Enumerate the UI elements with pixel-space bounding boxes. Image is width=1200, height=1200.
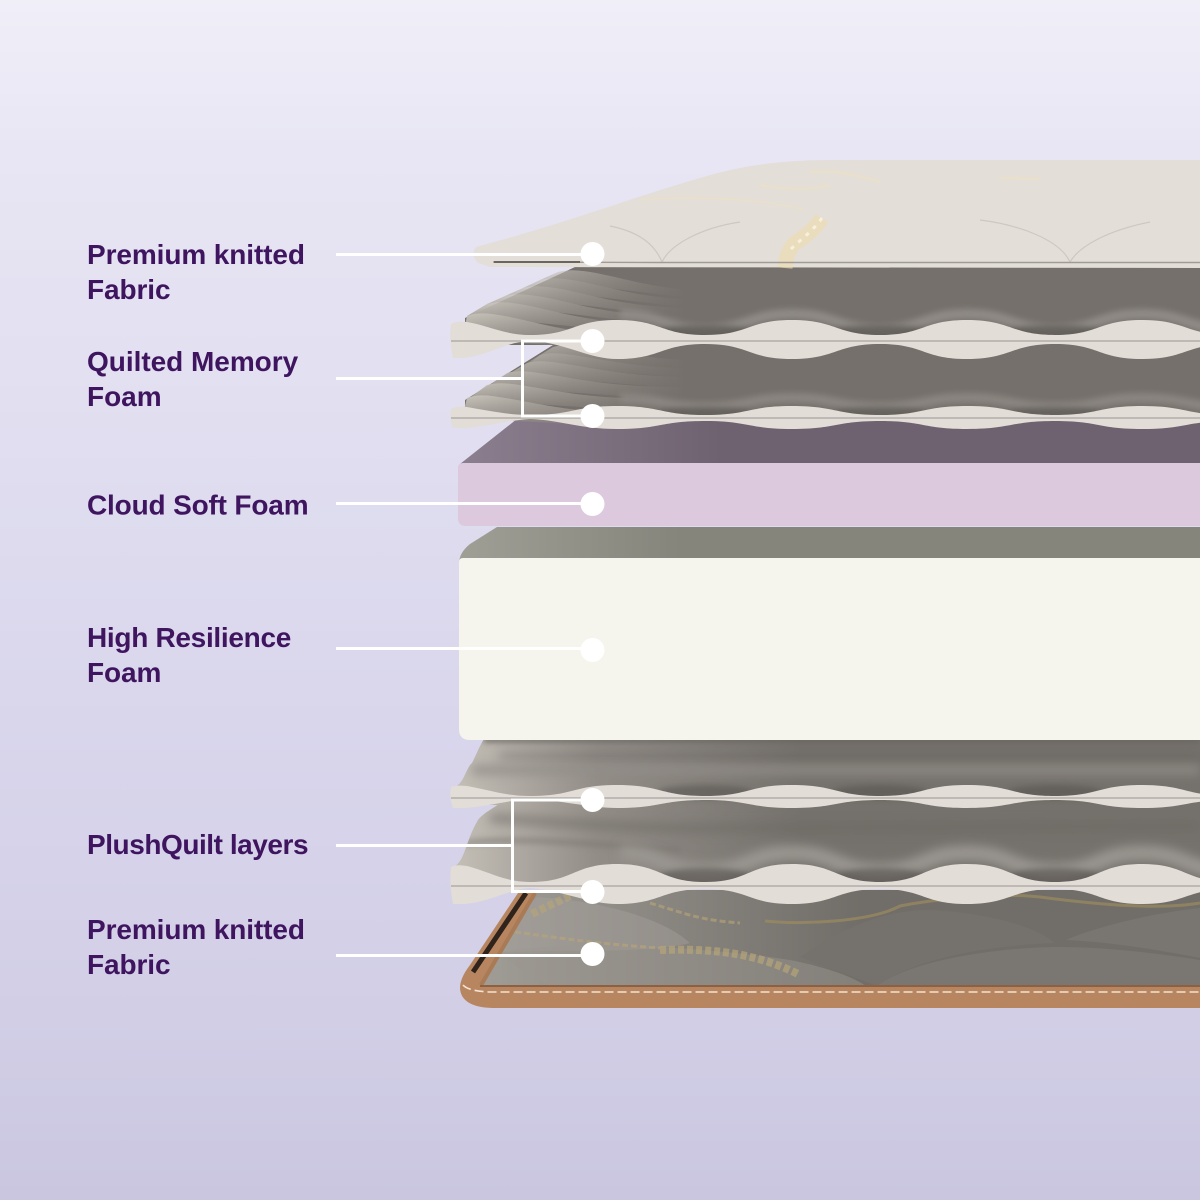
leather inner edge	[473, 893, 526, 972]
heading: Fabric	[87, 949, 170, 980]
layer: plushquilt lower sheet	[450, 864, 1200, 904]
leather border	[460, 893, 1200, 1008]
heading: Foam	[87, 657, 161, 688]
callout: cloud soft foam	[87, 490, 604, 520]
layer: plushquilt lower foam surface	[456, 805, 1200, 882]
foam top	[459, 527, 1200, 562]
foam top	[460, 415, 1200, 464]
layer: quilted memory foam lower sheet	[450, 406, 1200, 429]
layer: quilted memory foam lower surface	[462, 345, 1200, 428]
quilting seams	[610, 220, 1150, 262]
heading: Fabric	[87, 274, 170, 305]
layer: quilted memory foam upper surface	[462, 267, 1200, 350]
layer: high resilience foam	[459, 527, 1200, 740]
callout: premium knitted fabric top	[87, 239, 604, 305]
stitching	[463, 985, 1200, 992]
layer: quilted memory foam upper sheet	[450, 320, 1200, 359]
heading: Cloud Soft Foam	[87, 490, 308, 520]
heading: Premium knitted	[87, 914, 305, 945]
layer: top knitted fabric	[473, 160, 1200, 268]
heading: High Resilience	[87, 622, 291, 653]
layer: plushquilt upper sheet	[450, 785, 1200, 808]
heading: Foam	[87, 381, 162, 412]
heading: Quilted Memory	[87, 346, 298, 377]
layer: cloud soft foam	[458, 415, 1200, 526]
layer: bottom knitted fabric	[460, 890, 1200, 1008]
heading: PlushQuilt layers	[87, 829, 308, 860]
fabric edge line	[493, 261, 1200, 264]
foam front	[458, 463, 1200, 526]
inner quilted surface	[483, 890, 1200, 986]
foam front	[459, 558, 1200, 740]
gold stitch pattern	[640, 172, 1040, 268]
layer: plushquilt upper foam surface	[455, 739, 1200, 805]
callout: high resilience foam	[87, 622, 604, 688]
callout: quilted memory foam	[87, 329, 604, 428]
callout: plushquilt layers	[87, 788, 604, 904]
heading: Premium knitted	[87, 239, 305, 270]
callout: premium knitted fabric bottom	[87, 914, 604, 980]
